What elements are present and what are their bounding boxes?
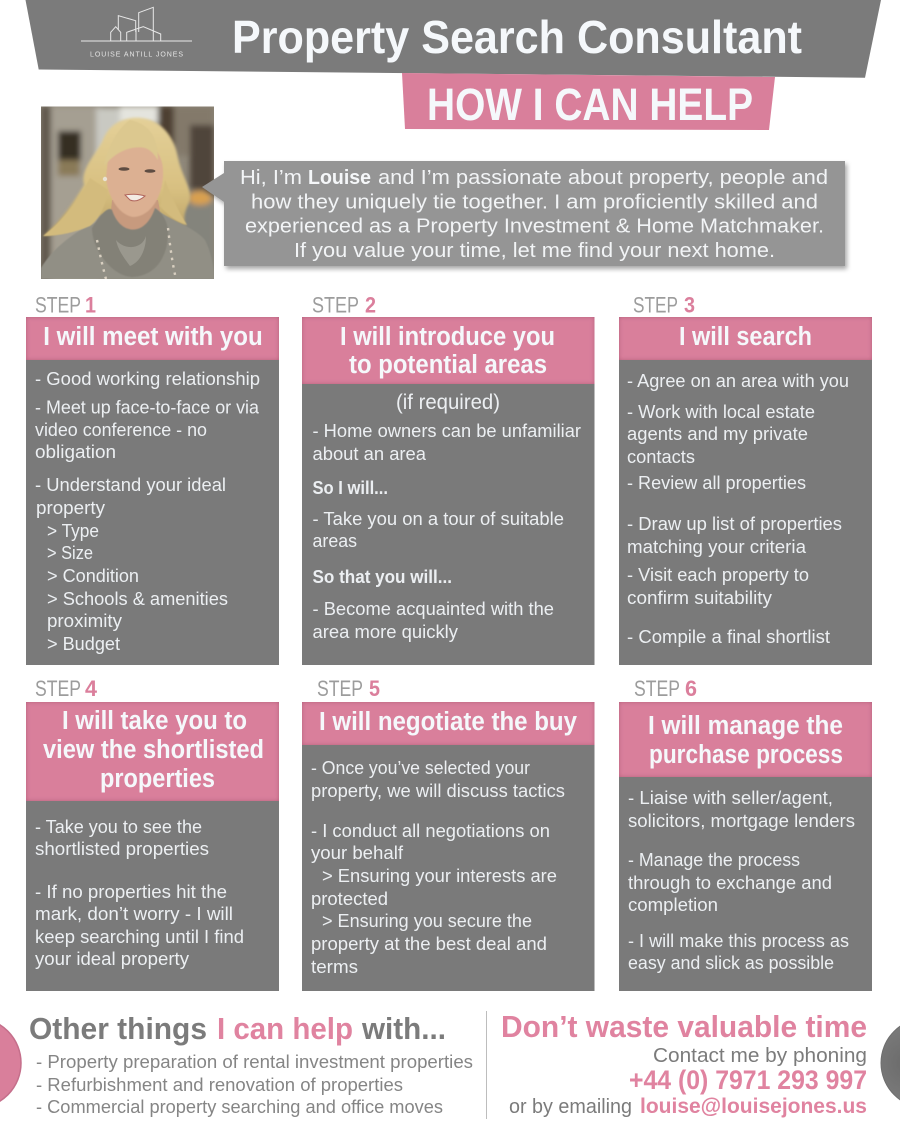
step 2 body text: areas	[312, 531, 357, 551]
panel: step 5	[302, 702, 594, 991]
speech bubble intro: how they uniquely tie together. I am proficiently skilled and	[251, 192, 818, 214]
speech bubble intro: Louise	[308, 167, 371, 189]
step 5 heading: I will negotiate the buy	[319, 708, 578, 736]
contact by email	[509, 1095, 867, 1118]
step 1 body text: > Type	[47, 521, 99, 541]
other services section	[29, 1011, 473, 1117]
contact heading: Don’t waste valuable time	[501, 1009, 867, 1044]
step 6 heading: purchase process	[649, 741, 843, 769]
contact section	[501, 1009, 867, 1118]
step 3 body text: confirm suitability	[627, 588, 772, 608]
step 4 heading	[26, 702, 279, 801]
step 3 body text: - Agree on an area with you	[627, 371, 849, 391]
step 5 body text: - Once you’ve selected your	[311, 758, 530, 778]
step 2 heading: to potential areas	[349, 351, 547, 379]
step 3 body text: - Review all properties	[627, 473, 806, 493]
other services heading: I can help	[217, 1011, 353, 1046]
other services heading: Other things	[29, 1011, 207, 1046]
contact by email: or by emailing	[509, 1096, 632, 1118]
step 5 label: STEP	[317, 676, 363, 701]
title: Property Search Consultant	[232, 11, 802, 63]
step 6 body text: through to exchange and	[628, 873, 832, 893]
step 3 body text: - Visit each property to	[627, 565, 809, 585]
step 5 label: 5	[369, 676, 380, 701]
step 5 body text	[311, 758, 565, 977]
step 3 body text: - Draw up list of properties	[627, 514, 842, 534]
step 2 body text	[312, 391, 581, 642]
step 1 body text: > Schools & amenities	[47, 589, 228, 609]
panel: step 3	[619, 317, 872, 665]
step 3 body text: contacts	[627, 447, 695, 467]
step 1 body text: proximity	[47, 611, 122, 631]
speech bubble intro	[202, 161, 845, 266]
step 1 label: 1	[85, 293, 96, 318]
step 6 label: 6	[685, 676, 697, 701]
hair	[43, 118, 190, 236]
step 1 label: STEP	[35, 293, 81, 318]
step 1 body text: video conference - no	[35, 420, 207, 440]
step 6 label: STEP	[634, 676, 680, 701]
step 5 body text: protected	[311, 889, 388, 909]
step 2 body text: - Take you on a tour of suitable	[312, 509, 564, 529]
step 6 body text: solicitors, mortgage lenders	[628, 811, 855, 831]
speech bubble intro: Hi, I’m	[240, 167, 302, 189]
header banner	[26, 0, 881, 78]
step 6 body text: easy and slick as possible	[628, 953, 834, 973]
step 5 body text: > Ensuring your interests are	[322, 866, 557, 886]
step 4 label: 4	[85, 676, 97, 701]
step 6 body text: - I will make this process as	[628, 931, 849, 951]
step 2 body text: area more quickly	[312, 622, 458, 642]
step 4 body text: mark, don’t worry - I will	[35, 904, 233, 924]
step 3 body text: - Compile a final shortlist	[627, 627, 830, 647]
step 1 body text: > Size	[47, 543, 93, 563]
contact by email: louise@louisejones.us	[640, 1095, 867, 1118]
step 3 body text	[627, 371, 849, 647]
portrait photo	[41, 106, 214, 281]
step 4 heading: view the shortlisted	[43, 736, 264, 764]
sweater	[41, 212, 214, 279]
step 6 heading	[619, 702, 872, 777]
step 1 body text	[35, 369, 260, 654]
decorative grey circle right	[881, 1018, 900, 1108]
step 2 body text: So I will...	[312, 478, 388, 498]
other services heading: with...	[361, 1011, 446, 1046]
step 6 body text: completion	[628, 895, 718, 915]
step 2 body text: (if required)	[396, 391, 500, 414]
step 1 body text: - Good working relationship	[35, 369, 260, 389]
step 1 heading: I will meet with you	[43, 323, 263, 351]
hair strands over shoulders	[43, 208, 187, 236]
step 1 body text: obligation	[35, 442, 116, 462]
step 1 body text: property	[36, 498, 105, 518]
step 3 body text: agents and my private	[627, 424, 808, 444]
other services list	[36, 1052, 473, 1117]
other services list: - Refurbishment and renovation of properties	[36, 1075, 403, 1095]
step 4 body text: - Take you to see the	[35, 817, 202, 837]
step 3 label: STEP	[633, 293, 678, 318]
step 2 heading	[302, 317, 594, 384]
neck	[111, 200, 160, 230]
step 4 body text: shortlisted properties	[35, 839, 209, 859]
face	[106, 144, 163, 217]
step 1 body text: > Condition	[47, 566, 139, 586]
contact by phone: Contact me by phoning	[653, 1045, 867, 1067]
step 5 body text: your behalf	[311, 843, 404, 863]
step 2 body text: about an area	[312, 444, 427, 464]
step 4 body text: keep searching until I find	[35, 927, 244, 947]
step 3 body text: - Work with local estate	[627, 402, 815, 422]
step 5 body text: terms	[311, 957, 358, 977]
step 1 body text: > Budget	[47, 634, 120, 654]
step 3 label: 3	[684, 293, 695, 318]
step 1 body text: - Understand your ideal	[35, 475, 226, 495]
step 2 heading: I will introduce you	[340, 323, 555, 351]
step 5 body text: property at the best deal and	[311, 934, 547, 954]
decorative pink circle left	[0, 1018, 21, 1108]
step 5 body text: property, we will discuss tactics	[311, 781, 565, 801]
step 6 heading: I will manage the	[648, 712, 843, 740]
panel: step 1	[26, 317, 279, 665]
step 2 body text: - Become acquainted with the	[312, 599, 554, 619]
step 2 body text: So that you will...	[312, 567, 452, 587]
speech bubble intro: experienced as a Property Investment & Home Matchmaker.	[245, 216, 824, 238]
step 5 body text: - I conduct all negotiations on	[311, 821, 550, 841]
panel: step 2	[302, 317, 594, 665]
step 4 body text: - If no properties hit the	[35, 882, 227, 902]
step 3 body text: matching your criteria	[627, 537, 807, 557]
cowl	[92, 208, 168, 277]
logo: Louise Antill Jones: LOUISE ANTILL JONES	[90, 52, 183, 58]
subtitle banner: how I can help: HOW I CAN HELP	[427, 79, 753, 130]
contact by phone	[629, 1045, 867, 1095]
step 4 body text	[35, 817, 244, 969]
step 4 heading: properties	[100, 765, 215, 793]
logo: Louise Antill Jones	[81, 7, 192, 59]
panel: step 6	[619, 702, 872, 991]
step 1 body text: - Meet up face-to-face or via	[35, 397, 260, 417]
step 6 body text	[628, 788, 855, 973]
other services list: - Commercial property searching and office moves	[36, 1097, 443, 1117]
step 4 label: STEP	[35, 676, 81, 701]
other services list: - Property preparation of rental investment properties	[36, 1052, 473, 1072]
panel: step 4	[26, 702, 279, 991]
speech bubble intro: If you value your time, let me find your next home.	[294, 240, 775, 262]
contact by phone: +44 (0) 7971 293 997	[629, 1065, 867, 1095]
step 3 heading: I will search	[679, 323, 812, 351]
step 2 label: 2	[365, 293, 376, 318]
other services heading	[29, 1011, 446, 1046]
step 5 body text: > Ensuring you secure the	[322, 911, 532, 931]
step 1 heading	[26, 317, 279, 360]
step 3 heading	[619, 317, 872, 360]
step 6 body text: - Manage the process	[628, 850, 800, 870]
step 2 label: STEP	[312, 293, 359, 318]
step 6 body text: - Liaise with seller/agent,	[628, 788, 833, 808]
step 4 heading: I will take you to	[62, 707, 247, 735]
speech bubble intro: and I’m passionate about property, people and	[378, 167, 828, 189]
step 4 body text: your ideal property	[35, 949, 189, 969]
step 2 body text: - Home owners can be unfamiliar	[312, 421, 581, 441]
step 5 heading	[302, 702, 594, 745]
